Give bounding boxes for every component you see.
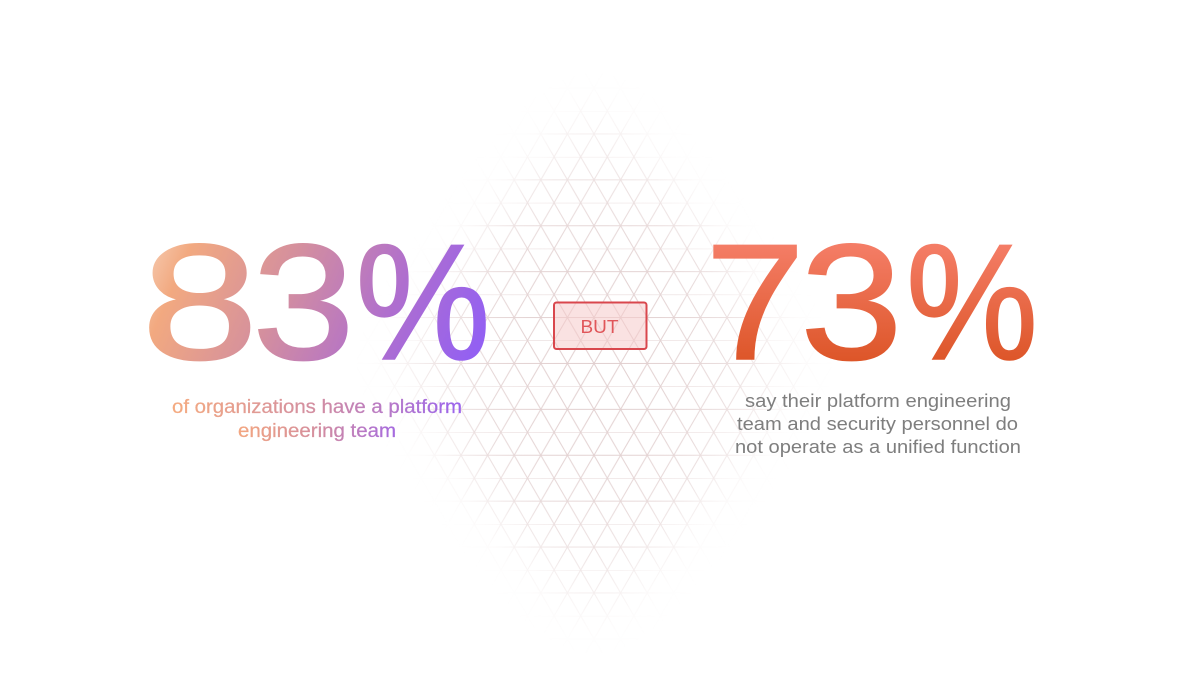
big number 83%: 3 (252, 210, 355, 395)
infographic canvas (149, 112, 1034, 611)
big number 73%: % (906, 211, 1038, 395)
caption: of organizations have a platform engineering team: engineering team (238, 421, 396, 442)
caption: of organizations have a platform engineering team: of organizations have a platform (172, 397, 462, 418)
caption: say their platform engineering team and security personnel do not operate as a unified function: team and security personnel do (737, 413, 1018, 434)
left statistic: 83% (141, 209, 490, 442)
right statistic: 73% (705, 210, 1038, 457)
big number 73%: 3 (800, 210, 903, 395)
big number 73% (705, 210, 1038, 395)
big number 83% (141, 209, 490, 395)
BUT badge (554, 302, 646, 349)
caption: say their platform engineering team and security personnel do not operate as a unified function (735, 390, 1021, 457)
big number 73%: 7 (705, 210, 805, 394)
background triangle lattice diamond (394, 112, 796, 611)
big number 83%: 8 (141, 210, 258, 395)
big number 83%: % (356, 209, 490, 394)
caption: say their platform engineering team and security personnel do not operate as a unified function: say their platform engineering (745, 390, 1011, 411)
caption: say their platform engineering team and security personnel do not operate as a unified function: not operate as a unified function (735, 436, 1021, 457)
BUT badge: BUT (580, 317, 619, 337)
caption: of organizations have a platform engineering team (172, 397, 462, 442)
